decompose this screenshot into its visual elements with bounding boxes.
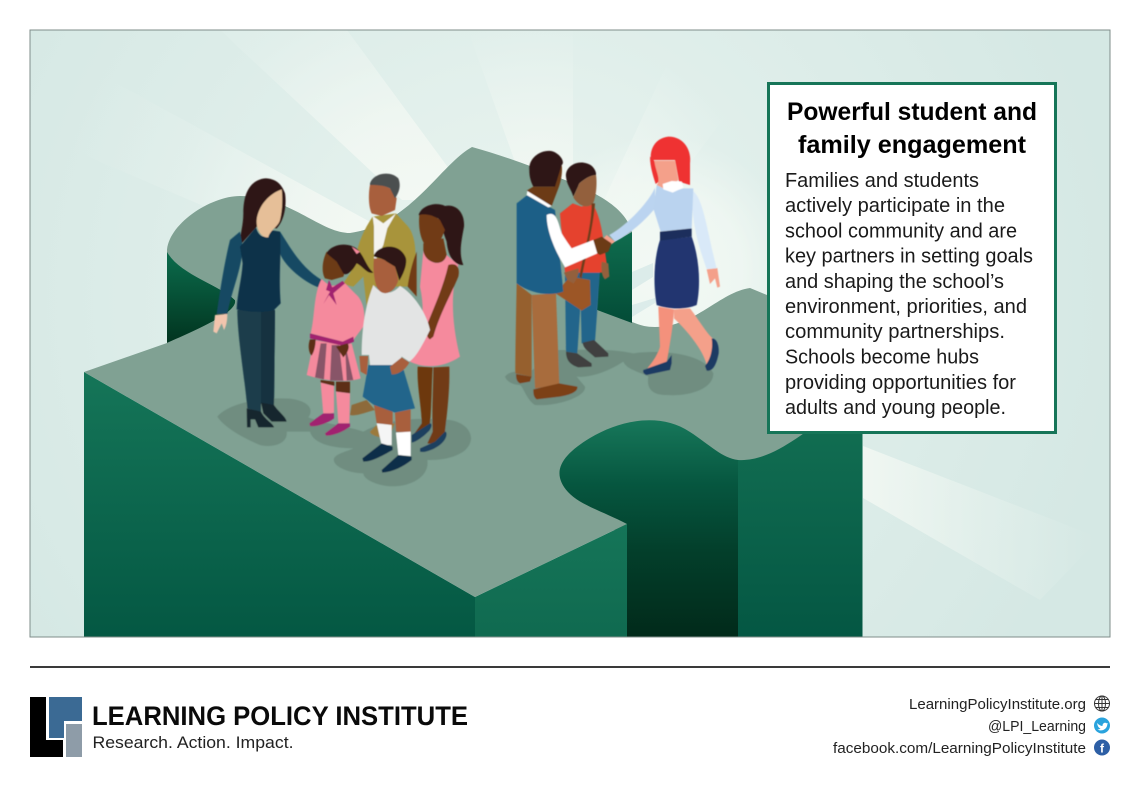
face: back right inner wall bbox=[597, 232, 632, 323]
contact: twitter: @LPI_Learning bbox=[988, 718, 1086, 735]
panel: illustration background with sun rays bbox=[30, 30, 1110, 637]
callout body text: actively participate in the bbox=[785, 195, 1005, 217]
face: left notch inner wall bbox=[167, 250, 235, 343]
woman in navy top bbox=[213, 178, 322, 427]
callout body text bbox=[785, 170, 1033, 419]
ground shadows bbox=[217, 398, 471, 486]
icon: facebook: f bbox=[1100, 742, 1105, 756]
callout body text: key partners in setting goals bbox=[785, 246, 1033, 268]
callout heading: Powerful student and bbox=[787, 98, 1037, 126]
handshake ground shadows bbox=[505, 350, 713, 405]
man in mustard jacket bbox=[343, 174, 416, 438]
callout body text: providing opportunities for bbox=[785, 372, 1016, 394]
puzzle top surface bbox=[84, 147, 880, 597]
organization name: LEARNING POLICY INSTITUTE bbox=[92, 701, 468, 731]
man in blue vest bbox=[515, 151, 597, 399]
callout heading: family engagement bbox=[798, 131, 1027, 159]
clasped hands bbox=[593, 235, 615, 255]
callout body text: environment, priorities, and bbox=[785, 296, 1027, 318]
callout body text: community partnerships. bbox=[785, 321, 1005, 343]
girl in pink bbox=[307, 245, 373, 436]
face: left front wall bbox=[84, 372, 475, 637]
callout body text: Families and students bbox=[785, 170, 979, 192]
logo: LPI mark bbox=[30, 697, 82, 757]
face: right front wall bbox=[738, 400, 862, 637]
callout body text: and shaping the school’s bbox=[785, 271, 1004, 293]
callout body text: Schools become hubs bbox=[785, 346, 979, 368]
callout box: powerful student and family engagement bbox=[768, 84, 1056, 432]
icon: globe bbox=[1094, 696, 1110, 711]
people group: handshake bbox=[505, 137, 720, 405]
boy in white shirt bbox=[359, 247, 430, 473]
icon: twitter bbox=[1094, 718, 1110, 734]
callout heading bbox=[787, 98, 1037, 159]
contact: facebook: facebook.com/LearningPolicyInstitute bbox=[833, 740, 1086, 757]
icon: facebook bbox=[1094, 740, 1110, 756]
face: middle front wall bbox=[475, 524, 627, 637]
contact: website: LearningPolicyInstitute.org bbox=[909, 696, 1086, 713]
face: dark front notch bbox=[540, 420, 738, 637]
woman with red hair bbox=[609, 137, 720, 375]
puzzle piece bbox=[84, 147, 880, 637]
woman in pink dress bbox=[408, 204, 464, 452]
callout body text: school community and are bbox=[785, 220, 1017, 242]
callout body text: adults and young people. bbox=[785, 397, 1006, 419]
tagline: Research. Action. Impact. bbox=[92, 733, 294, 752]
boy with bag bbox=[556, 162, 609, 367]
people group: teacher greeting family bbox=[213, 174, 471, 486]
